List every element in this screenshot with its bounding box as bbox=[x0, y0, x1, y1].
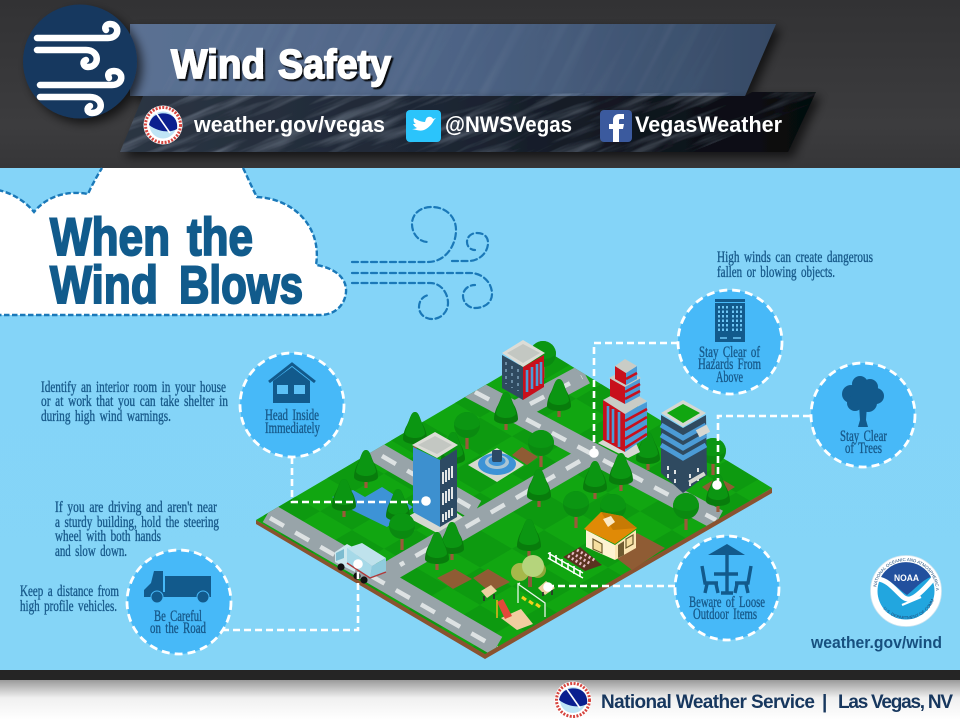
text block: falling objects: fallen or blowing objects. bbox=[717, 264, 835, 281]
building: blue tower bbox=[407, 432, 463, 533]
label line 2: of Trees bbox=[845, 440, 882, 457]
truck bbox=[335, 543, 386, 584]
label line 3: Above bbox=[716, 369, 743, 386]
heading: Wind Safety bbox=[171, 41, 391, 87]
house bbox=[584, 512, 637, 560]
icon: NOAA logo: U.S. DEPARTMENT OF COMMERCE bbox=[884, 598, 934, 620]
icon: NOAA logo: NATIONAL OCEANIC AND ATMOSPHERIC ADMINISTRATION bbox=[873, 558, 939, 591]
connector: trees bbox=[718, 416, 810, 485]
label: Stay Clear of bbox=[699, 344, 760, 361]
icon: building bbox=[715, 299, 745, 342]
text block: interior room: or at work that you can take shelter in bbox=[41, 393, 228, 410]
text block: vehicles: Keep a distance from bbox=[20, 583, 119, 600]
text block: driving: and slow down. bbox=[55, 543, 127, 560]
title line 2: Wind bbox=[50, 256, 158, 315]
callout: hazards from above bbox=[678, 290, 782, 394]
roads bbox=[268, 374, 718, 648]
label: Be Careful bbox=[154, 608, 202, 625]
footer text: | bbox=[822, 692, 827, 713]
wind swirls bbox=[352, 207, 492, 319]
link: weather.gov/wind: weather.gov/wind bbox=[810, 633, 942, 652]
text block: vehicles: high profile vehicles. bbox=[20, 598, 117, 615]
label: Beware of Loose bbox=[689, 594, 765, 611]
icon: wind badge bbox=[23, 4, 137, 118]
main sky panel bbox=[0, 168, 960, 670]
label line 2: Hazards From bbox=[698, 356, 761, 373]
text block: falling objects bbox=[717, 249, 873, 281]
cloud with title bbox=[0, 168, 346, 315]
callout: head inside bbox=[240, 353, 344, 457]
icon: NWS logo footer bbox=[554, 682, 592, 718]
building: blue striped tower bbox=[661, 400, 710, 493]
text block: interior room bbox=[41, 379, 228, 425]
footer band bbox=[0, 670, 960, 720]
connector: head inside bbox=[292, 457, 425, 502]
label: Head Inside bbox=[265, 407, 319, 424]
icon: patio table bbox=[702, 544, 751, 593]
text block: driving bbox=[55, 499, 219, 560]
label: Stay Clear bbox=[840, 428, 887, 445]
text block: driving: wheel with both hands bbox=[55, 528, 161, 545]
text block: interior room: during high wind warnings. bbox=[41, 408, 171, 425]
building: red tower bbox=[598, 359, 647, 458]
label line 2: Immediately bbox=[265, 420, 320, 437]
fence and garden bbox=[548, 547, 602, 578]
icon: NOAA logo: NOAA bbox=[894, 573, 919, 583]
icon: NWS logo header bbox=[144, 106, 182, 144]
icon: facebook bbox=[600, 110, 632, 142]
text block: driving: If you are driving and aren't near bbox=[55, 499, 217, 516]
header background bbox=[0, 0, 960, 168]
callout: be careful on the road bbox=[127, 550, 231, 654]
building: top red bbox=[502, 340, 545, 400]
playground bbox=[481, 555, 555, 630]
label line 2: Outdoor Items bbox=[693, 606, 757, 623]
footer text: Las Vegas, NV bbox=[838, 692, 953, 713]
footer text: National Weather Service bbox=[601, 692, 815, 713]
title line 2: Blows bbox=[179, 256, 303, 315]
isometric city bbox=[256, 340, 772, 659]
links ribbon bbox=[120, 92, 822, 160]
title line 1: When bbox=[50, 208, 170, 267]
text block: interior room: Identify an interior room in your house bbox=[41, 379, 226, 396]
trees front bbox=[332, 450, 730, 570]
pond bbox=[332, 487, 413, 527]
connector: hazards bbox=[594, 343, 678, 453]
footer text bbox=[601, 692, 953, 713]
icon: tree bbox=[842, 376, 884, 427]
title banner bbox=[130, 24, 782, 104]
text block: driving: a sturdy building, hold the steering bbox=[55, 514, 219, 531]
text block: vehicles bbox=[20, 583, 119, 615]
heading: Wind Safety: Safety bbox=[278, 41, 391, 87]
callout: outdoor items bbox=[675, 536, 779, 640]
icon: house bbox=[269, 364, 315, 403]
callout: trees bbox=[811, 363, 915, 467]
connector: outdoor bbox=[548, 585, 675, 587]
link: facebook name: VegasWeather bbox=[635, 112, 782, 137]
brown patches bbox=[437, 447, 735, 592]
fountain bbox=[468, 448, 524, 482]
connector: be careful bbox=[222, 566, 358, 630]
title line 2 bbox=[50, 256, 303, 315]
connector dots bbox=[353, 448, 722, 592]
ground slab bbox=[256, 350, 772, 659]
heading: Wind Safety: Wind bbox=[171, 41, 265, 87]
link: twitter handle: @NWSVegas bbox=[445, 112, 572, 137]
text block: falling objects: High winds can create dangerous bbox=[717, 249, 873, 266]
title line 1: the bbox=[187, 208, 253, 267]
trees back bbox=[403, 341, 726, 475]
link: weather.gov/vegas: weather.gov/vegas bbox=[193, 112, 385, 137]
icon: twitter bbox=[406, 110, 441, 142]
icon: truck bbox=[144, 571, 211, 603]
label line 2: on the Road bbox=[150, 620, 206, 637]
